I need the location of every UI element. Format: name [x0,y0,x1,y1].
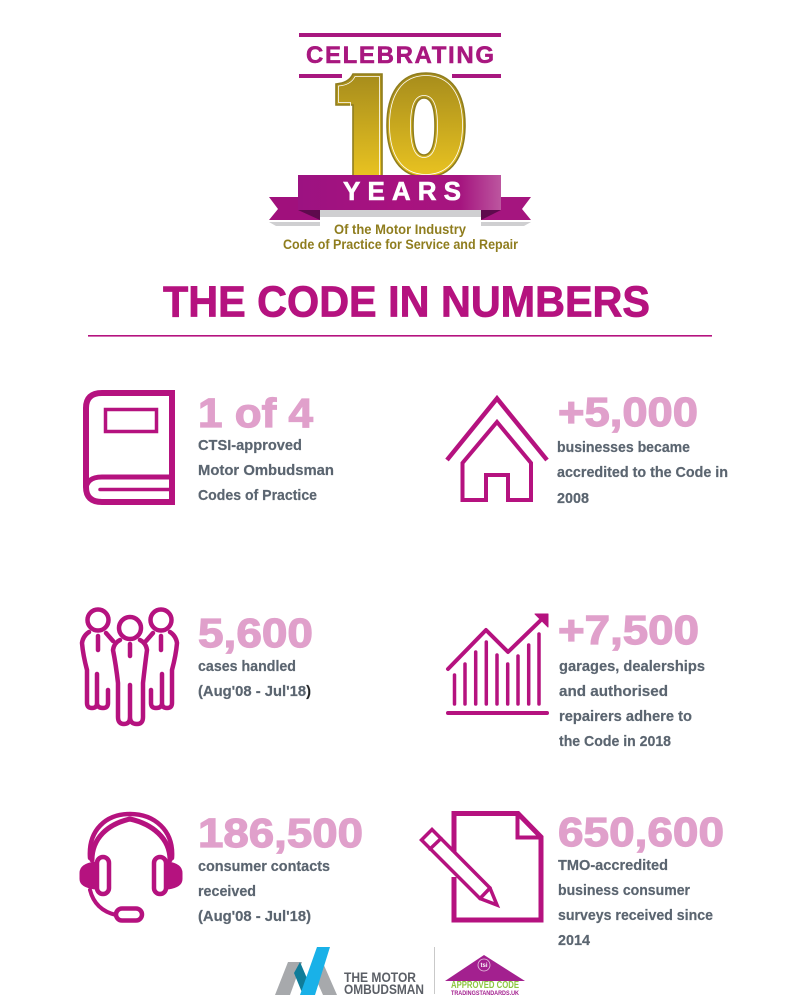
stat: 186,500: 186,500 [198,810,363,856]
icon: headset [80,814,182,920]
description: codes [198,437,334,504]
description: garages: garages, dealerships [559,658,705,675]
logo subtitle: Code of Practice for Service and Repair [283,237,519,252]
description: cases: cases handled [198,658,296,675]
description: surveys: TMO-accredited [558,857,668,874]
logo mark [275,947,337,995]
description: businesses [557,439,728,507]
description: codes: Motor Ombudsman [198,462,334,479]
description: surveys [558,857,713,949]
logo heading: celebrating: CELEBRATING [306,42,494,69]
ribbon: YEARS [343,176,461,206]
panel: +7,500 [448,607,705,750]
numeral 10 [336,73,465,177]
description: businesses: 2008 [557,490,589,507]
logo lower bars [299,74,501,78]
icon: document and pencil [422,814,541,920]
stat: 5,600: 5,600 [198,610,313,656]
title: THE CODE IN NUMBERS [163,278,650,326]
wordmark: OMBUDSMAN [344,982,424,997]
ribbon [269,175,531,226]
description: contacts: consumer contacts [198,858,330,875]
logo top bar [299,33,501,37]
description: cases: (Aug'08 - Jul'18) [198,683,311,700]
stat: 650,600: 650,600 [558,809,724,855]
panel: 186,500 [80,810,363,925]
description: garages: and authorised [559,683,668,700]
description: garages: repairers adhere to [559,708,692,725]
description: surveys: 2014 [558,932,591,949]
description: businesses: accredited to the Code in [557,464,728,481]
panel: 650,600 [422,809,724,949]
icon: house [447,398,547,500]
logo: celebrating 10 years [269,33,531,252]
description: garages [559,658,705,750]
stat: +7,500: +7,500 [558,607,699,653]
wordmark: THE MOTOR [344,970,416,985]
description: businesses: businesses became [557,439,690,456]
description: garages: the Code in 2018 [559,733,671,750]
description: codes: Codes of Practice [198,487,317,504]
tsi roof [445,955,525,981]
approved code text: APPROVED CODE [451,980,519,991]
description: surveys: surveys received since [558,907,713,924]
logo: approved code: tsi [480,963,488,969]
panel: 5,600 [82,610,313,724]
description: surveys: business consumer [558,882,690,899]
icon: book [86,393,173,502]
stat: 1 of 4: 1 of 4 [198,390,313,436]
logo: approved code [445,955,525,997]
wordmark [344,970,424,997]
panel: 1 of 4 [86,390,334,504]
description: contacts [198,858,330,925]
panel: +5,000 [447,389,728,507]
tsi badge [478,959,490,971]
description: contacts: received [198,883,256,900]
logo subtitle [283,222,519,252]
logo: the motor ombudsman [275,947,424,997]
description: codes: CTSI-approved [198,437,302,454]
logo subtitle: Of the Motor Industry [334,222,466,237]
description: cases [198,658,311,700]
icon: rising chart [448,614,548,713]
stat: +5,000: +5,000 [558,389,698,435]
trading standards text: TRADINGSTANDARDS.UK [451,990,519,997]
description: contacts: (Aug'08 - Jul'18) [198,908,311,925]
icon: three people [82,610,177,724]
